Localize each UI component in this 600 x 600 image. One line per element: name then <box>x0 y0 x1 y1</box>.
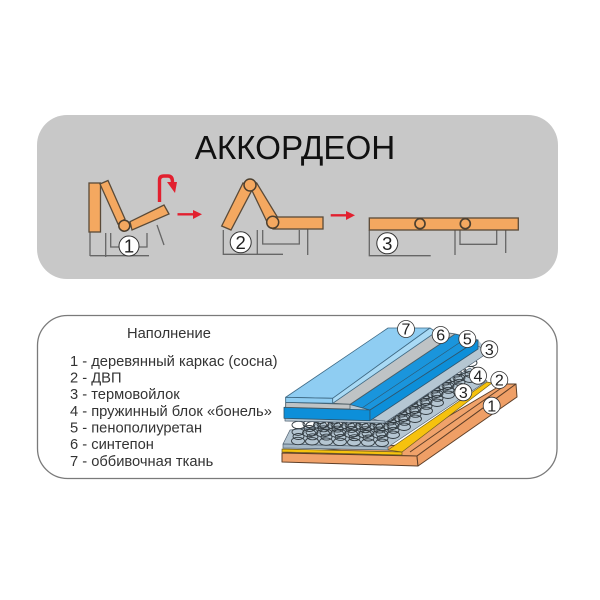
legend list: 6 - синтепон <box>70 437 154 453</box>
heading: filling: Наполнение <box>127 326 211 342</box>
diagram: mattress layers <box>282 320 517 466</box>
step 2: half-open sofa <box>222 179 323 255</box>
backing behind upper layers <box>285 328 489 423</box>
legend list: 4 - пружинный блок «бонель» <box>70 404 272 420</box>
arrow: step 1 to step 2 <box>178 210 202 219</box>
layer 6: synthetic padding <box>286 331 455 409</box>
number badges <box>398 320 508 415</box>
layer 3: lower felt <box>283 368 487 450</box>
layer 4: spring block <box>292 357 477 446</box>
number badges: 1 <box>487 398 496 415</box>
icon: red fold arrow <box>160 176 177 202</box>
label: 3: 3 <box>382 233 392 254</box>
panel: mechanism <box>37 115 558 279</box>
number badges: 6 <box>436 328 445 345</box>
layer 1: wood frame <box>282 384 517 466</box>
layer 2: fibreboard <box>282 382 492 455</box>
step 3: unfolded sofa <box>369 218 518 256</box>
panel: filling <box>38 316 557 478</box>
legend list <box>70 354 277 470</box>
label: 2: 2 <box>236 232 246 253</box>
layer 7: upholstery fabric <box>286 328 436 403</box>
legend list: 5 - пенополиуретан <box>70 420 202 436</box>
legend list: 2 - ДВП <box>70 370 122 386</box>
number badges: 3 <box>459 385 468 402</box>
number badges: 7 <box>402 322 411 339</box>
number badges: 5 <box>463 332 472 349</box>
number badges: 4 <box>474 368 483 385</box>
step 1: folded sofa <box>89 180 169 257</box>
title: АККОРДЕОН <box>195 130 395 167</box>
layer 3: upper felt <box>285 346 489 423</box>
label: 3 <box>377 233 398 254</box>
legend list: 7 - оббивочная ткань <box>70 454 214 470</box>
label: 1: 1 <box>124 236 134 256</box>
layer 5: polyurethane foam <box>284 334 478 421</box>
arrow: step 2 to step 3 <box>331 211 355 220</box>
legend list: 3 - термовойлок <box>70 387 180 403</box>
legend list: 1 - деревянный каркас (сосна) <box>70 354 277 370</box>
number badges: 3 <box>485 342 494 359</box>
number badges: 2 <box>495 373 504 390</box>
